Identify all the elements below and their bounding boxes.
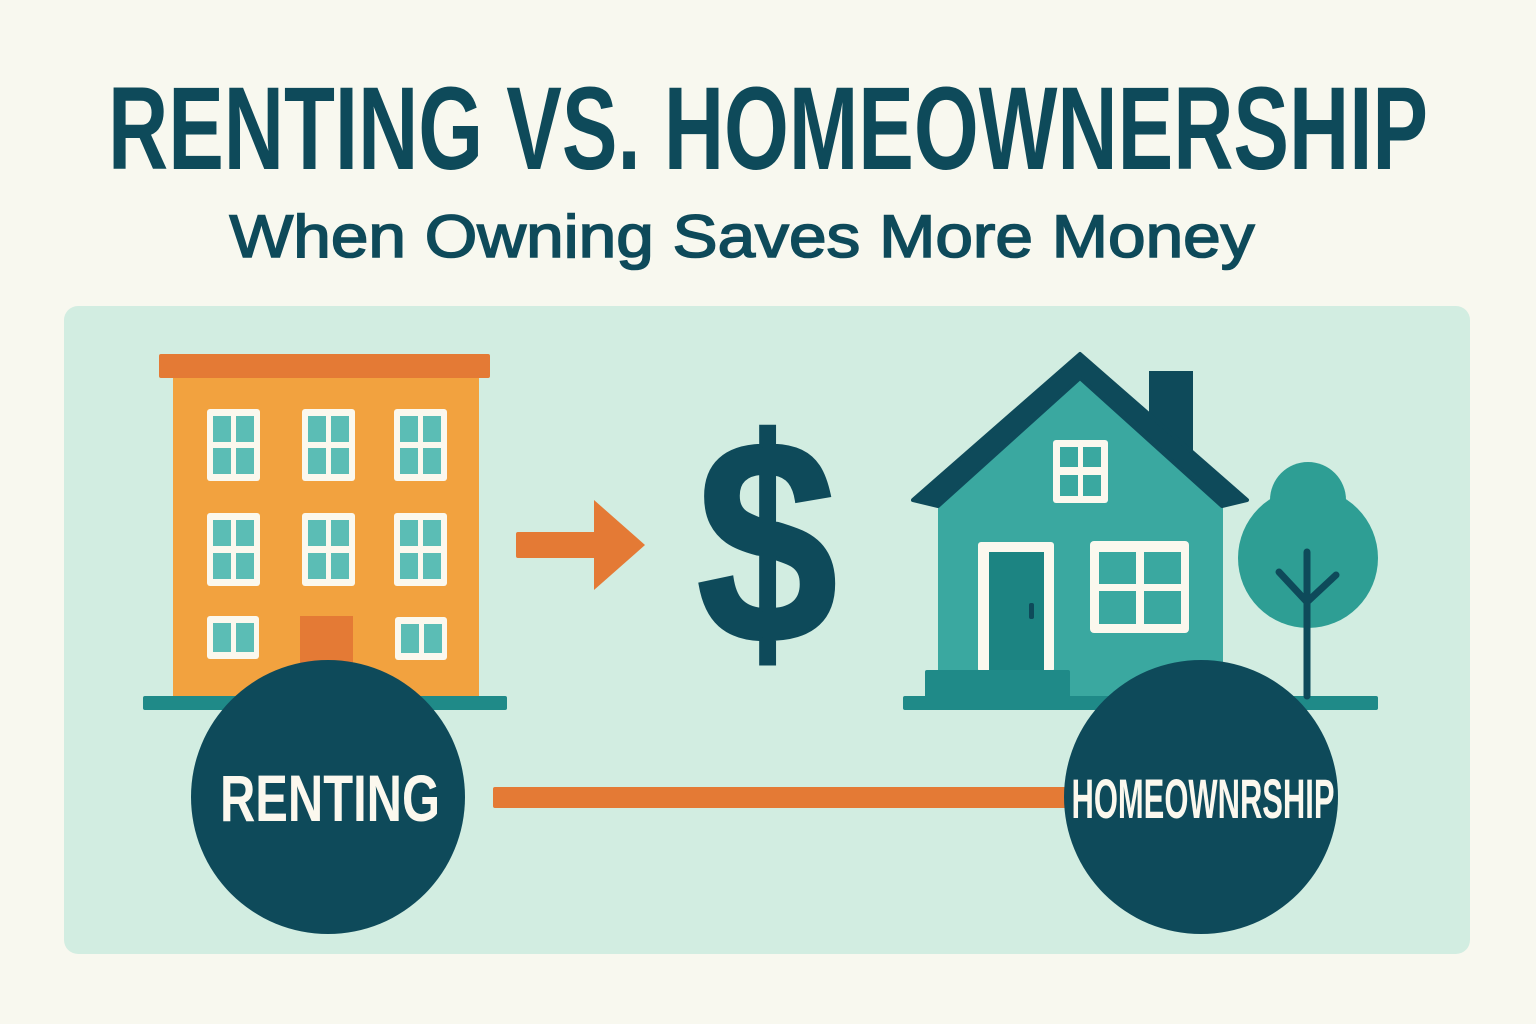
circle: renting xyxy=(191,660,465,934)
icon: tree xyxy=(1238,462,1378,696)
panel: illustration background xyxy=(64,306,1470,954)
arrow xyxy=(516,500,645,590)
icon: dollar sign: $ xyxy=(697,380,837,704)
circle: homeownership: HOMEOWNRSHIP xyxy=(1072,767,1334,830)
connector line xyxy=(493,787,1068,808)
icon: house xyxy=(903,354,1378,710)
circle: homeownership xyxy=(1064,660,1338,934)
circle: renting: RENTING xyxy=(220,761,440,835)
subtitle: When Owning Saves More Money xyxy=(230,203,1254,270)
icon: apartment building xyxy=(143,354,507,710)
